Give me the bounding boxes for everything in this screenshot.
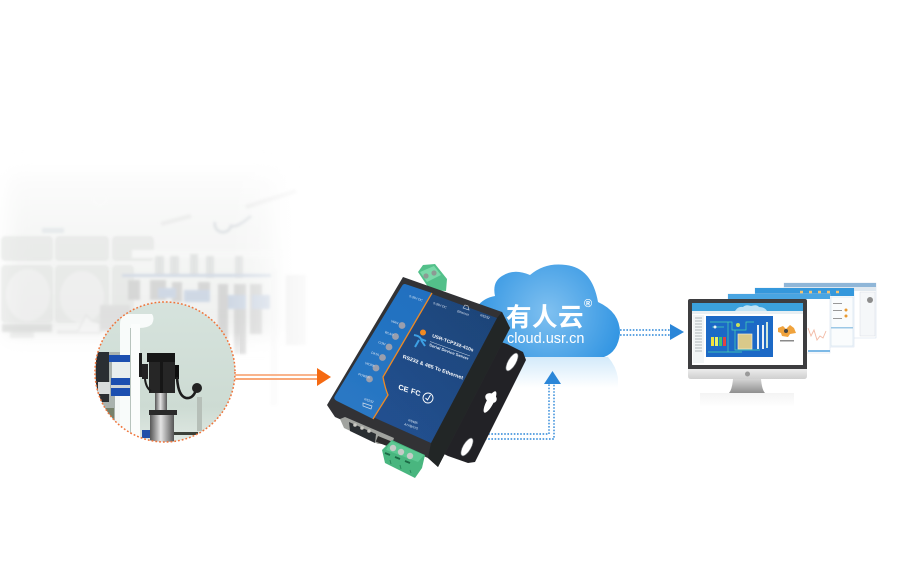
LED labels: WAN <box>391 319 400 326</box>
USR person logo <box>414 330 426 347</box>
LED labels: POWER <box>358 372 371 380</box>
window: middle <box>755 288 854 347</box>
motor bracket <box>139 353 142 377</box>
dotted arrow: cloud to monitor <box>620 324 684 340</box>
chin <box>688 369 807 379</box>
port labels <box>364 294 490 431</box>
process diagram <box>706 316 773 357</box>
serial device server <box>327 264 526 478</box>
cloud service: ® <box>584 298 592 310</box>
cloud service: cloud.usr.cn <box>507 331 584 347</box>
LED labels <box>358 319 400 380</box>
tagline: RS232 & 485 To Ethernet <box>402 354 464 381</box>
window: back <box>784 283 876 338</box>
bezel <box>688 299 807 369</box>
port labels: Ethernet <box>457 309 469 317</box>
screen <box>692 303 803 365</box>
status LEDs <box>366 322 405 382</box>
LED labels: DATA <box>371 351 380 357</box>
photo circle: pump close-up <box>95 302 235 444</box>
LED labels: WORK <box>365 361 376 368</box>
LED labels: COM <box>378 340 386 346</box>
bottom green terminal <box>382 440 425 478</box>
orange divider line <box>373 293 432 419</box>
software screens and monitor <box>688 283 876 407</box>
dotted arrow: device up to cloud <box>485 371 561 439</box>
top green terminal <box>418 264 447 291</box>
white pipes <box>120 314 154 340</box>
cloud reflection <box>504 357 618 388</box>
blue front panel <box>334 284 497 443</box>
ethernet port icon <box>463 305 469 310</box>
faded factory background photo <box>0 170 330 410</box>
window: front <box>728 294 830 353</box>
RS232 port icon <box>363 403 372 409</box>
port labels: RS232 <box>364 397 374 404</box>
port labels: 5-36V DC <box>409 294 424 303</box>
port labels: 5-36V DC <box>433 301 448 310</box>
CE mark: CE <box>398 382 409 394</box>
mounting bracket <box>436 340 526 463</box>
model name: USR-TCP232-410s <box>432 333 474 354</box>
monitor reflection <box>700 393 794 407</box>
infographic canvas <box>0 198 876 478</box>
cloud shape <box>470 264 620 357</box>
monitor body <box>688 299 807 407</box>
cloud service <box>470 264 620 388</box>
port labels: RS485 <box>408 418 418 425</box>
check mark <box>423 393 433 403</box>
port labels: RS232 <box>480 313 490 320</box>
device body <box>327 277 510 467</box>
orange map <box>778 325 796 337</box>
FC mark: FC <box>410 386 422 399</box>
port labels: A/Y/B/Y/G <box>404 422 419 431</box>
motor <box>147 353 175 362</box>
cloud logo text: 有人云 <box>506 304 584 332</box>
blue front panel: Serial Device Server <box>429 342 469 361</box>
valve stack <box>95 352 120 421</box>
LED labels: WLAN <box>384 330 395 337</box>
stand <box>729 379 765 393</box>
DB9 connector <box>340 417 394 447</box>
pump body <box>155 393 167 410</box>
arrow: pump to device <box>235 368 331 386</box>
soft haze <box>8 175 278 335</box>
